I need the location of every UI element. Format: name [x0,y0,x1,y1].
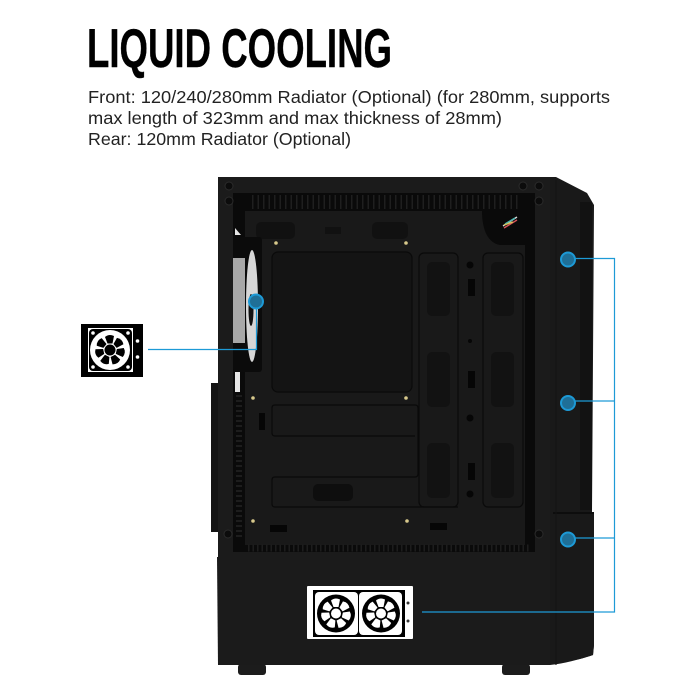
top vent [252,195,520,209]
right tray pills [427,262,514,498]
lower tray cutout [272,405,458,507]
lower case shroud [217,557,550,665]
cable slot pill [313,484,353,501]
icon: single radiator fan [81,324,143,377]
description text: Rear: 120mm Radiator (Optional) [88,129,351,149]
top tray pills [256,222,408,239]
case frame [218,177,550,557]
large tray cutout [272,252,412,392]
description text: Front: 120/240/280mm Radiator (Optional) (for 280mm, supports [88,87,610,107]
motherboard tray [245,211,525,545]
brass standoffs [251,241,409,523]
front cables [482,211,525,245]
callout lines [148,258,614,612]
description text [88,87,610,149]
front mesh strip [580,202,592,510]
callout markers [249,252,575,546]
description text: max length of 323mm and max thickness of 28mm) [88,108,502,128]
left side bracket [211,383,219,532]
front panel [545,177,594,665]
icon: dual radiator fans [307,586,413,639]
rear fan [233,228,262,392]
PC case [211,177,594,675]
interior [233,193,535,552]
corner screws [224,182,543,538]
case feet [238,664,530,675]
bottom vent [248,544,530,552]
tray slots and holes [259,262,475,532]
left vent strip [236,395,242,540]
right tray panels [419,253,523,507]
title: LIQUID COOLING [87,17,392,79]
